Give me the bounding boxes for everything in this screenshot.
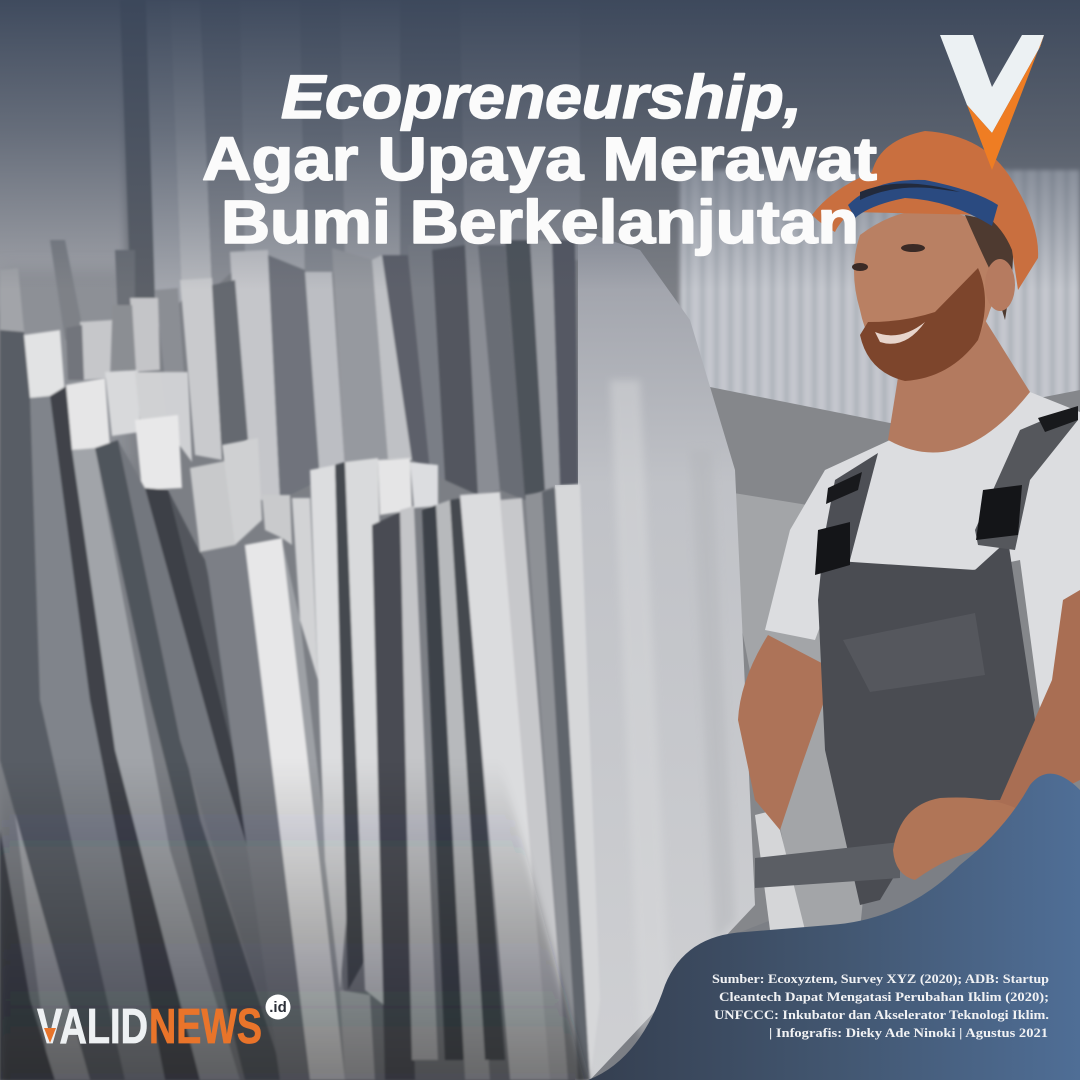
eyes xyxy=(901,244,925,252)
title: Ecopreneurship, xyxy=(281,63,802,131)
ear xyxy=(985,259,1015,311)
buckles xyxy=(815,522,850,575)
neck xyxy=(888,320,1030,452)
handrail pipe xyxy=(755,842,900,888)
photo: rack of tall metal bars behind xyxy=(50,0,580,500)
ValidNews logo: NEWS xyxy=(149,1000,262,1054)
overalls pocket xyxy=(843,613,985,692)
source credits xyxy=(712,971,1049,1040)
worker xyxy=(738,131,1080,905)
straps xyxy=(820,453,878,560)
hat band xyxy=(848,180,998,226)
arms xyxy=(738,635,835,830)
bottom-right curved panel xyxy=(588,774,1080,1080)
source credits: Sumber: Ecoxyztem, Survey XYZ (2020); ADB: Startup xyxy=(712,971,1049,986)
V logo top right xyxy=(940,35,1044,170)
overalls xyxy=(818,540,1035,905)
title: Agar Upaya Merawat xyxy=(202,125,877,193)
ValidNews logo xyxy=(37,994,290,1054)
dark hair xyxy=(965,215,1015,320)
photo: front fan of metal bars xyxy=(0,268,600,1080)
hand xyxy=(893,798,1020,880)
ValidNews logo: .id xyxy=(269,999,287,1016)
hard hat xyxy=(812,131,1038,290)
white t-shirt xyxy=(765,392,1080,720)
source credits: UNFCCC: Inkubator dan Akselerator Teknologi Iklim. xyxy=(714,1007,1049,1022)
title xyxy=(202,63,877,256)
source credits: | Infografis: Dieky Ade Ninoki | Agustus 2021 xyxy=(769,1025,1048,1040)
source credits: Cleantech Dapat Mengatasi Perubahan Iklim (2020); xyxy=(719,989,1049,1004)
face xyxy=(854,210,999,378)
beard xyxy=(860,268,985,381)
smile xyxy=(875,322,925,344)
title: Bumi Berkelanjutan xyxy=(221,188,859,256)
ValidNews logo: VALID xyxy=(37,1000,148,1054)
photo: large white sheet xyxy=(555,230,755,1080)
